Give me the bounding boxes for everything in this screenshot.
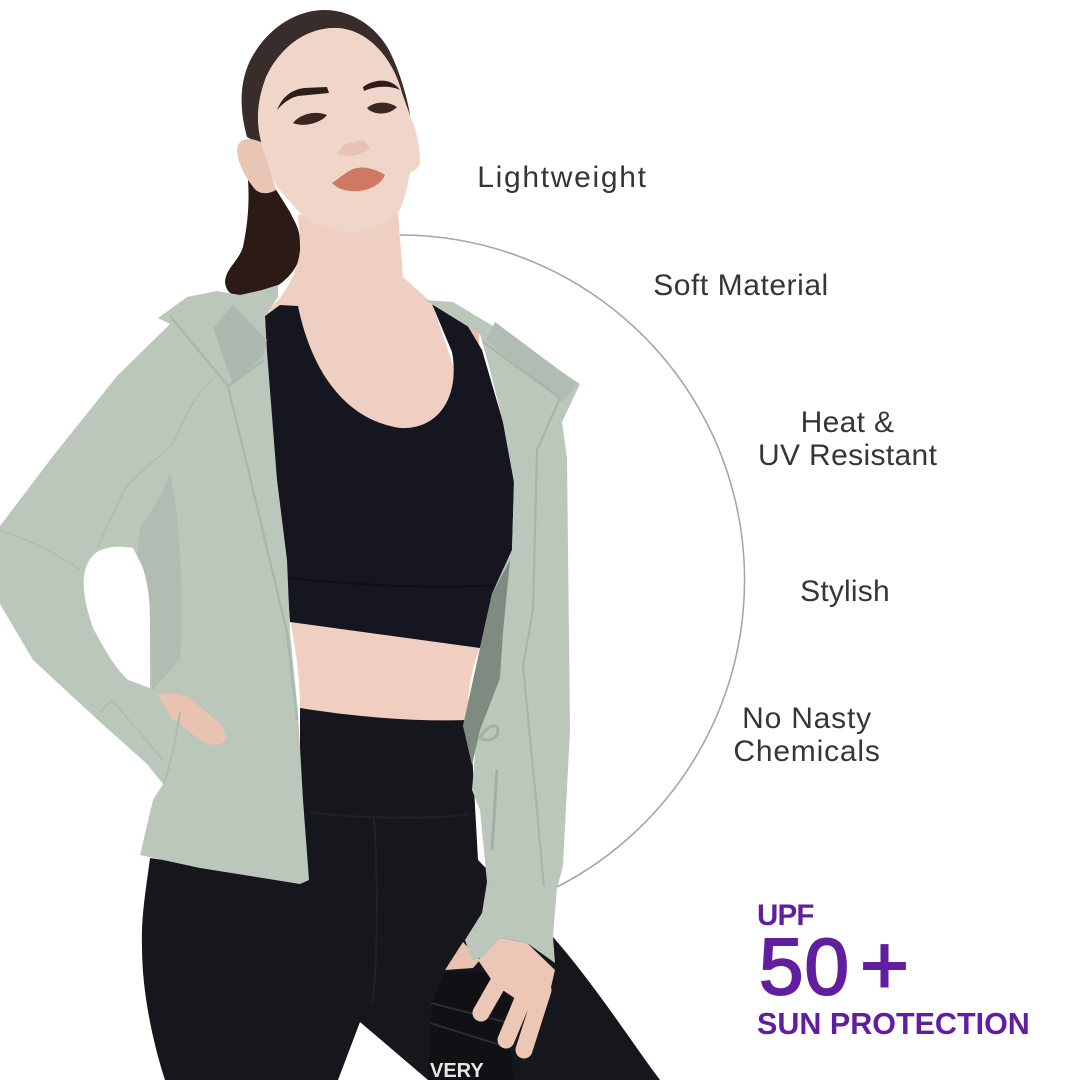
badge label: UPF: UPF — [757, 899, 814, 932]
bra band shading — [286, 578, 495, 587]
feature: No Nasty Chemicals — [733, 702, 881, 768]
thumb cuff — [465, 882, 557, 963]
ponytail — [225, 180, 300, 296]
palm — [478, 938, 555, 1005]
raglan sleeve seam — [0, 378, 213, 760]
hood inner — [213, 305, 267, 384]
nose shadow — [337, 140, 370, 156]
lips — [332, 167, 385, 191]
ear — [237, 139, 276, 193]
feature: No Nasty Chemicals: No Nasty — [742, 702, 872, 735]
feature: Heat and UV Resistant: UV Resistant — [758, 439, 937, 472]
jacket seam — [483, 342, 560, 889]
skin sliver beyond strap — [467, 322, 480, 354]
midriff — [290, 620, 482, 720]
neck and chest — [266, 212, 458, 430]
fingers — [481, 985, 543, 1050]
feature: Stylish: Stylish — [800, 575, 890, 608]
feature: Lightweight: Lightweight — [477, 161, 648, 194]
pocket edge — [164, 712, 180, 784]
jacket shoulder band — [486, 322, 578, 402]
collar and zipper seams — [170, 316, 297, 720]
arc: feature circle — [400, 235, 745, 888]
leggings — [142, 705, 660, 1080]
feature: Heat and UV Resistant: Heat & — [801, 406, 894, 439]
badge caption: sun protection: SUN PROTECTION — [757, 1007, 1030, 1041]
leggings seam — [310, 812, 470, 1005]
thumb base — [445, 942, 480, 970]
feature: Heat and UV Resistant — [758, 406, 937, 472]
bottle ridges — [430, 1003, 510, 1048]
underarm panel — [137, 472, 182, 690]
face — [258, 28, 420, 232]
feature: Soft Material: Soft Material — [653, 269, 829, 302]
jacket shadow beside waist — [463, 560, 510, 765]
eyebrows — [277, 81, 400, 110]
badge value: 50+: 50+ — [759, 918, 910, 1012]
feature: No Nasty Chemicals: Chemicals — [733, 735, 881, 768]
badge: UPF 50+ sun protection — [757, 899, 1030, 1041]
hair — [242, 10, 411, 145]
hand in pocket — [157, 693, 225, 745]
hand holding bottle — [445, 938, 555, 1050]
pocket fold — [480, 726, 498, 850]
eyes — [293, 103, 397, 125]
jacket right panel — [425, 300, 580, 889]
sports bra — [265, 304, 514, 648]
bottle — [428, 972, 513, 1080]
jacket left panel with hood and sleeve — [0, 285, 309, 884]
